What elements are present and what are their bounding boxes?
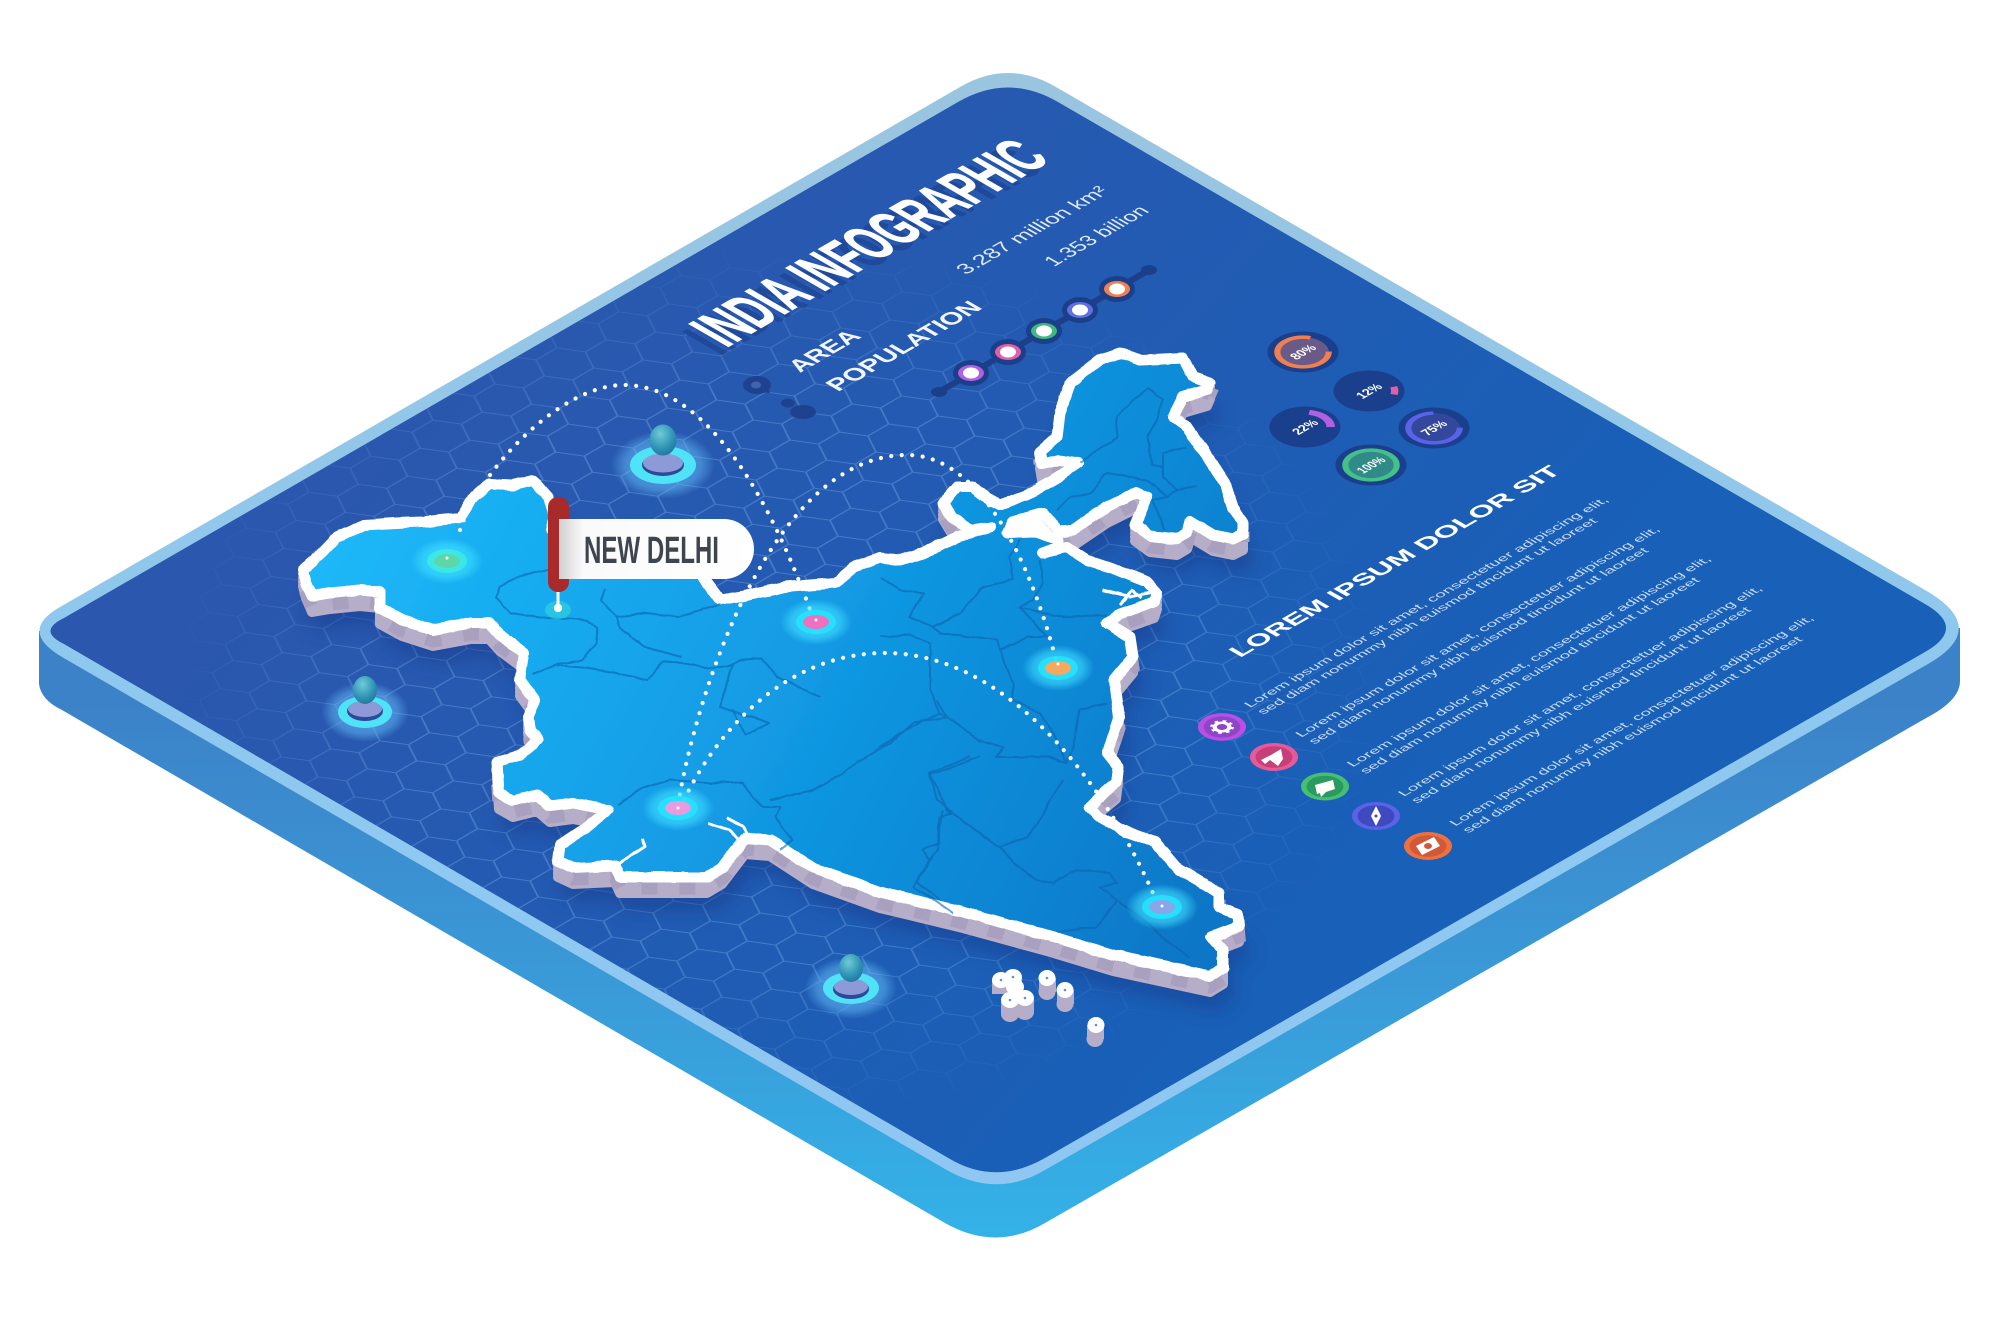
- map extruded side: [303, 357, 1243, 992]
- sphere marker: south: [805, 954, 897, 1019]
- india map: [303, 353, 1243, 976]
- pin: green: [411, 538, 483, 584]
- section heading: LOREM IPSUM DOLOR SIT: [1223, 462, 1567, 661]
- donut: 75 percent: [1383, 398, 1485, 458]
- icon: gear: [1188, 707, 1256, 747]
- platform face: [50, 88, 1946, 1172]
- donut: 12 percent: [1319, 362, 1419, 420]
- paragraphs: Lorem ipsum dolor sit amet, consectetuer adipiscing elit,: [1446, 613, 1817, 828]
- flag: new delhi: [545, 497, 754, 619]
- flag: new delhi: NEW DELHI: [584, 530, 719, 572]
- population label: POPULATION: [820, 297, 989, 395]
- paragraphs: sed diam nonummy nibh euismod tincidunt ut laoreet: [1305, 545, 1653, 746]
- paragraphs: Lorem ipsum dolor sit amet, consectetuer adipiscing elit,: [1240, 495, 1612, 710]
- donut: 100 percent: 100%: [1353, 454, 1389, 476]
- platform base side: [39, 628, 1960, 1238]
- area value: 3.287 million km²: [951, 183, 1114, 278]
- population timeline: [931, 265, 1157, 397]
- icon: chat: [1301, 772, 1349, 800]
- title: INDIA INFOGRAPHIC: [674, 130, 1064, 355]
- paragraphs: sed diam nonummy nibh euismod tincidunt ut laoreet: [1459, 634, 1807, 835]
- pin: pink: [780, 599, 852, 645]
- paragraphs: Lorem ipsum dolor sit amet, consectetuer adipiscing elit,: [1292, 525, 1663, 739]
- icon: compass: [1352, 802, 1400, 830]
- donut: 22 percent: [1255, 398, 1355, 456]
- population value: 1.353 billion: [1039, 203, 1154, 270]
- paragraphs: [1240, 495, 1817, 835]
- paragraphs: Lorem ipsum dolor sit amet, consectetuer adipiscing elit,: [1394, 584, 1766, 798]
- paragraphs: Lorem ipsum dolor sit amet, consectetuer adipiscing elit,: [1343, 554, 1715, 769]
- icon: camera: [1404, 832, 1452, 860]
- pin: orange: [1022, 645, 1094, 691]
- donut: 80 percent: 80%: [1286, 342, 1320, 362]
- area label: AREA: [782, 326, 868, 376]
- dotted connection arcs: [460, 385, 1156, 900]
- donut: 22 percent: 22%: [1288, 417, 1322, 437]
- pin: lilac: [642, 785, 714, 831]
- donut: 80 percent: [1252, 322, 1354, 382]
- icon: area and population pins: [743, 376, 816, 419]
- donut: 12 percent: 12%: [1352, 381, 1386, 401]
- title: INDIA INFOGRAPHIC: [668, 138, 1058, 363]
- icon: flag: [1250, 743, 1298, 771]
- sphere marker: north: [611, 424, 715, 499]
- donut: 100 percent: [1321, 436, 1421, 494]
- sphere marker: west: [321, 676, 409, 742]
- paragraphs: sed diam nonummy nibh euismod tincidunt ut laoreet: [1356, 575, 1704, 776]
- paragraphs: sed diam nonummy nibh euismod tincidunt ut laoreet: [1407, 604, 1755, 805]
- title: [668, 130, 1064, 363]
- donut: 75 percent: 75%: [1417, 418, 1451, 438]
- islands: [992, 969, 1104, 1047]
- hexagon background pattern: [224, 282, 1338, 1081]
- pin: blue: [1126, 884, 1198, 930]
- map shadow: [309, 383, 1249, 1006]
- paragraphs: sed diam nonummy nibh euismod tincidunt ut laoreet: [1253, 516, 1602, 717]
